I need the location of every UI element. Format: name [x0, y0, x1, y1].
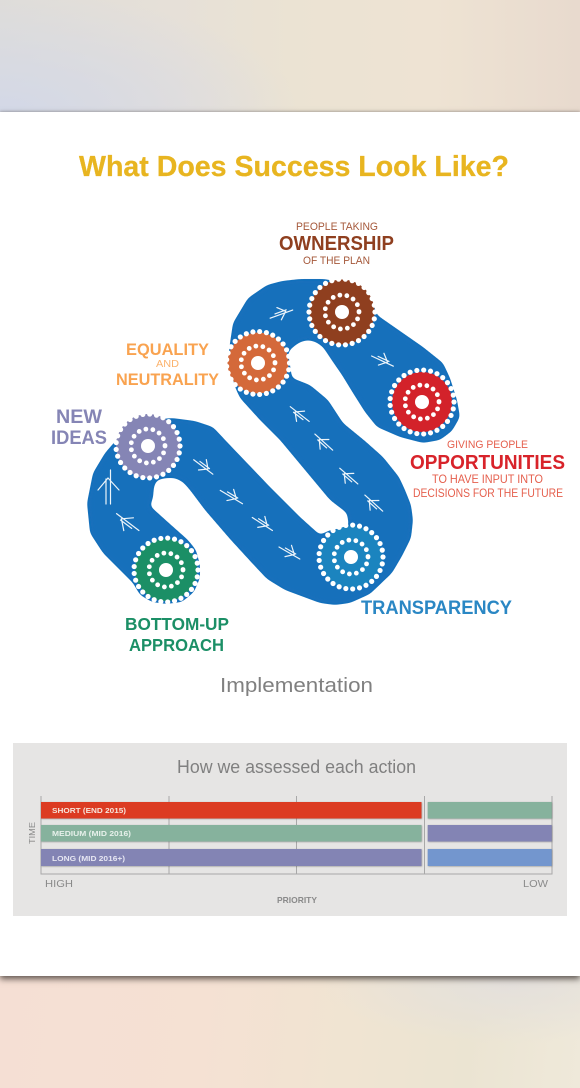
arrow: path 5 — [335, 464, 361, 490]
node: ownership — [309, 279, 375, 345]
axis label: high: HIGH — [45, 878, 73, 890]
arrow: path 3 — [286, 402, 312, 428]
arrow: path 1 — [268, 303, 294, 323]
bar label: medium: MEDIUM (MID 2016) — [52, 831, 131, 838]
bar: medium low priority — [428, 802, 552, 818]
panel: assessment key — [13, 743, 567, 916]
node: transparency — [319, 525, 383, 589]
background strip: bottom — [0, 976, 580, 1088]
label: equality and neutrality — [116, 340, 220, 389]
arrow: path 11 — [98, 470, 119, 504]
label: bottom-up approach — [125, 614, 229, 655]
label: opportunities: GIVING PEOPLE — [447, 439, 528, 451]
bar label: short: SHORT (END 2015) — [52, 808, 126, 815]
heading: implementation: Implementation — [220, 674, 373, 697]
axis label: time: TIME — [27, 822, 37, 844]
arrow: path 6 — [360, 491, 386, 517]
arrow: path 10 — [276, 540, 304, 564]
winding blue path — [87, 279, 460, 605]
bar: long high priority — [41, 849, 422, 866]
label: opportunities: TO HAVE INPUT INTO — [432, 472, 543, 486]
label: new ideas — [51, 407, 107, 449]
label: bottom-up approach: APPROACH — [129, 635, 224, 655]
label: ownership — [279, 221, 394, 267]
label: ownership: OF THE PLAN — [303, 255, 370, 267]
label: opportunities: OPPORTUNITIES — [410, 452, 565, 474]
node: equality and neutrality — [226, 332, 290, 394]
label: new ideas: IDEAS — [51, 428, 107, 449]
node: bottom-up approach — [134, 538, 198, 602]
label: equality and neutrality: EQUALITY — [126, 340, 210, 359]
label: ownership: PEOPLE TAKING — [296, 221, 378, 233]
label: transparency: TRANSPARENCY — [361, 598, 512, 619]
arrow: path 8 — [218, 484, 246, 508]
label: new ideas: NEW — [56, 407, 102, 428]
node: new ideas — [116, 414, 180, 478]
label: equality and neutrality: AND — [156, 359, 179, 370]
arrow: path 12 — [111, 508, 143, 538]
bar: medium high priority — [41, 825, 422, 842]
bar label: long: LONG (MID 2016+) — [52, 856, 125, 863]
node: opportunities — [390, 370, 454, 434]
heading: how we assessed each action: How we assessed each action — [177, 757, 416, 777]
axis label: low: LOW — [523, 878, 548, 890]
axis label: priority: PRIORITY — [277, 895, 317, 905]
arrow: path 9 — [249, 511, 277, 535]
label: opportunities — [410, 439, 565, 500]
title: What Does Success Look Like? — [79, 151, 509, 183]
arrow: path 2 — [369, 349, 397, 371]
label: bottom-up approach: BOTTOM-UP — [125, 614, 229, 634]
bar: long low priority — [428, 825, 552, 842]
bar: extended low priority — [428, 849, 552, 866]
label: equality and neutrality: NEUTRALITY — [116, 370, 220, 389]
chart: time and priority matrix — [27, 796, 552, 905]
label: ownership: OWNERSHIP — [279, 233, 394, 255]
arrow: path 7 — [191, 454, 217, 478]
panel: white card — [0, 112, 580, 976]
background strip: top — [0, 0, 580, 112]
arrow: path 4 — [310, 430, 336, 456]
bar: short high priority — [41, 802, 422, 818]
